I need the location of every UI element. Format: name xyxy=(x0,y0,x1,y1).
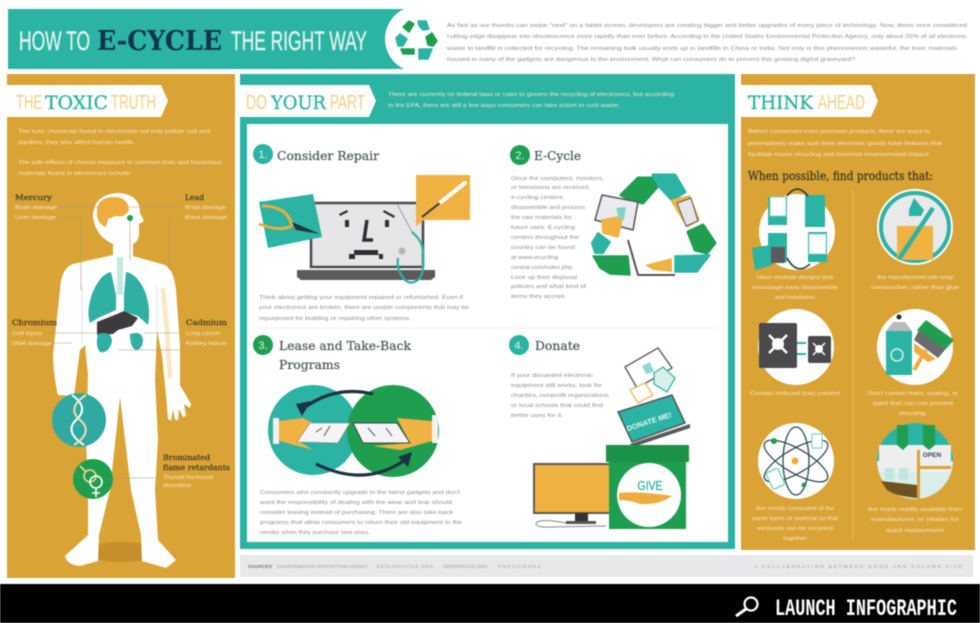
icon: magnifier xyxy=(736,598,758,616)
text: think ahead intro: Before consumers even purchase products, there are ways to xyxy=(748,129,930,135)
label: cadmium: Cadmium xyxy=(186,319,227,327)
step 4: donate xyxy=(509,335,690,529)
illustration: recycling triangle with devices xyxy=(592,175,715,275)
feature: readily available parts xyxy=(868,423,962,534)
caption: same types of material so that xyxy=(752,516,839,522)
monitor xyxy=(534,464,612,527)
text: toxic truth intro: materials found in electronics include: xyxy=(18,171,133,177)
icon: atom xyxy=(758,423,834,499)
intro text: As fast as our thumbs can swipe "next" on a tablet screen, developers are creating bigger and better upgrades of every piece of technology. Now, items once considered xyxy=(447,23,967,29)
illustration: donated devices falling into give box xyxy=(534,348,690,529)
eye dot xyxy=(127,215,133,221)
caption: Are manufactured with snap xyxy=(877,275,953,281)
text: e-cycle: policies and what kind of xyxy=(511,284,587,290)
text: do your part intro: to the EPA, there are still a few ways consumers can take action to curb waste. xyxy=(388,103,621,109)
callout lines xyxy=(44,207,184,478)
give box xyxy=(606,445,689,529)
icon: recycle symbol xyxy=(396,21,437,59)
intro text: housed in many of the gadgets are dangerous to the environment. What can consumers do to prevent this growing digital graveyard? xyxy=(447,57,855,63)
text: donate xyxy=(511,373,611,419)
label: lead: Bone damage xyxy=(185,215,227,221)
text: toxic truth intro: The toxic chemicals found in electronics not only pollute soil and xyxy=(18,129,210,135)
footer: sources strip: ENVIRONMENTAL PROTECTION AGENCY xyxy=(277,564,368,569)
number badge 2: 2. xyxy=(515,150,525,162)
heading: donate: Donate xyxy=(535,339,580,353)
number badge 4: 4. xyxy=(514,340,524,352)
footer: sources strip: POPSCIENCE xyxy=(498,564,541,569)
caption: Are made readily available from xyxy=(868,507,962,513)
heading: lease and take-back programs: Lease and Take-Back xyxy=(279,339,412,353)
caption: manufacturer, or retailer for xyxy=(871,517,959,523)
organ: kidneys xyxy=(97,333,143,352)
title xyxy=(19,26,367,57)
bottom bar: launch infographic xyxy=(0,584,980,623)
text: lease and take-back: vendor when they purchase new ones. xyxy=(260,530,371,536)
label: cadmium: Lung cancer xyxy=(186,331,221,337)
caption xyxy=(752,506,839,542)
icon: spray can and brush xyxy=(877,309,954,385)
label: lead: Brain damage xyxy=(185,205,226,211)
text: consider repair: repurposed for building or repairing other systems. xyxy=(259,316,412,322)
ribbon heading: the toxic truth: TOXIC xyxy=(45,92,108,114)
caption: and installation xyxy=(775,295,815,301)
text: e-cycle: country can be found xyxy=(511,245,575,251)
stethoscope xyxy=(397,204,423,283)
text: think ahead intro: preemptively make sure their electronic goods have features that xyxy=(748,141,943,147)
heading: lease and take-back programs: Programs xyxy=(279,358,340,372)
laptop with donate me screen: DONATE ME! xyxy=(626,410,673,433)
text: toxic truth intro: aquifers, they also affect human health. xyxy=(18,140,136,146)
footer: sources strip: SOURCES xyxy=(248,564,272,569)
icon: storefront: OPEN xyxy=(923,452,942,459)
text: do your part intro xyxy=(388,92,674,109)
text: e-cycle: future uses. E-cycling xyxy=(511,225,575,231)
organ: lungs xyxy=(88,257,149,325)
give box: GIVE xyxy=(638,478,663,493)
number badge 3 xyxy=(253,335,273,355)
heading: lease and take-back programs xyxy=(279,339,412,372)
text: e-cycle: at www.ecycling xyxy=(511,255,558,261)
title: HOW TO xyxy=(19,26,90,56)
label: mercury: Mercury xyxy=(15,194,52,202)
text: think ahead intro: facilitate easier recycling and minimize environmental impact: xyxy=(748,152,931,158)
feature: same materials xyxy=(752,423,839,542)
icon: modular device xyxy=(752,189,835,270)
text: toxic truth intro xyxy=(18,129,222,177)
caption xyxy=(871,275,959,291)
text: donate: better uses for it. xyxy=(511,413,564,419)
caption: encourage easy disassembly xyxy=(752,285,838,291)
title: E-CYCLE xyxy=(97,26,222,57)
subheading: when possible: When possible, find products that: xyxy=(748,168,933,183)
ribbon heading: the toxic truth: TRUTH xyxy=(111,92,156,114)
laptop with donate me screen xyxy=(618,395,690,447)
number badge 2 xyxy=(510,145,530,165)
label: brominated flame retardants xyxy=(163,454,230,489)
caption: recycling. xyxy=(899,411,928,417)
text: lease and take-back: want the responsibility of dealing with the wear and tear should xyxy=(259,500,452,506)
text: do your part intro: There are currently no federal laws or rules to govern the recycling of electronics, but according xyxy=(388,92,674,98)
circle: dna xyxy=(52,393,106,447)
caption: together xyxy=(783,536,807,542)
label: mercury xyxy=(15,194,57,221)
ribbon heading: do your part: PART xyxy=(330,92,365,114)
armpit creases xyxy=(82,285,157,345)
text: e-cycle: disassemble and process xyxy=(511,205,585,211)
caption: construction, rather than glue xyxy=(871,285,959,291)
footer: sources strip: ECOLIFESTYLE.ORG xyxy=(377,564,433,569)
caption: Have modular designs that xyxy=(757,275,834,281)
label: chromium: Chromium xyxy=(12,319,57,327)
heading: e-cycle: E-Cycle xyxy=(534,149,581,163)
text: e-cycle: e-cycling centers xyxy=(511,195,563,201)
feature: reduced toxic content xyxy=(750,309,841,397)
arm bones xyxy=(163,288,170,378)
text: e-cycle: Once the computers, monitors, xyxy=(511,176,605,182)
icon: toxic boxes shrinking xyxy=(758,309,834,385)
intro text: cutting-edge disappear into obsolescence more rapidly than ever before. According to the United States Environmental Protection Agency, only about 25% of all electronic xyxy=(447,34,967,40)
caption: Are mostly composed of the xyxy=(756,506,834,512)
label: brominated flame retardants: Thyroid hormonal xyxy=(163,475,213,481)
label: brominated flame retardants: Brominated xyxy=(163,454,211,462)
label: cadmium: Kidney failure xyxy=(186,341,227,347)
heading: consider repair: Consider Repair xyxy=(277,149,379,163)
panel: think ahead xyxy=(741,74,975,550)
human body figure xyxy=(44,193,191,568)
illustration: swapping tablets xyxy=(268,385,439,477)
ribbon heading: think ahead: AHEAD xyxy=(818,92,865,114)
ribbon heading: do your part xyxy=(240,85,376,117)
text: e-cycle: Look up their disposal xyxy=(511,275,577,281)
text: donate: equipment still works, look for xyxy=(511,383,602,389)
text: lease and take-back: Consumers who constantly upgrade to the latest gadgets and don't xyxy=(260,490,461,496)
label: cadmium xyxy=(186,319,227,347)
intro text: waste to landfill is collected for recycling. The remaining bulk usually ends up in landfills in China or India. Not only is this phenomenon wasteful, the toxic materials xyxy=(446,46,957,52)
text: consider repair: your electronics are broken, there are usable components that may be xyxy=(259,305,469,311)
footer: sources strip: A COLLABORATION BETWEEN GOOD AND COLUMN FIVE xyxy=(754,564,962,569)
organ: liver xyxy=(97,311,138,335)
caption: Contain reduced toxic content xyxy=(750,391,841,397)
caption xyxy=(752,275,838,301)
label: chromium: DNA damage xyxy=(12,341,52,347)
feature: no foam or coating xyxy=(868,309,958,417)
step 2: e-cycle xyxy=(510,145,715,300)
text: e-cycle: central.com/index.php. xyxy=(511,265,574,271)
feature: modular designs xyxy=(752,189,838,301)
ribbon heading: the toxic truth: THE xyxy=(16,92,42,114)
label: chromium: Cell injury xyxy=(12,331,42,337)
teal note with pliers xyxy=(259,194,322,248)
text: toxic truth intro: The side effects of chronic exposure to common toxic and hazardous xyxy=(18,160,222,166)
label: mercury: Liver damage xyxy=(15,215,56,221)
tablet xyxy=(625,348,672,388)
icon: no glue xyxy=(877,189,953,265)
text: e-cycle: or televisions are received, xyxy=(511,185,591,191)
caption: quick replacement xyxy=(886,528,945,534)
number badge 3: 3. xyxy=(258,340,268,352)
label: chromium xyxy=(12,319,57,347)
panel: the toxic truth xyxy=(7,74,235,578)
label: lead xyxy=(185,194,227,221)
footer: sources strip xyxy=(240,555,973,577)
title: THE RIGHT WAY xyxy=(231,26,367,56)
orange note with screwdriver xyxy=(416,175,470,226)
label: brominated flame retardants: disorders xyxy=(163,483,191,489)
footer: sources strip: GREENPEACE.ORG xyxy=(443,564,488,569)
ribbon heading: think ahead xyxy=(741,85,878,117)
ribbon heading: think ahead: THINK xyxy=(748,92,814,114)
floor shadow xyxy=(85,542,159,562)
sad face xyxy=(339,210,395,259)
caption xyxy=(868,391,958,417)
text: donate: If your discarded electronic xyxy=(511,373,593,379)
number badge 1 xyxy=(253,144,273,164)
label: brominated flame retardants: flame retardants xyxy=(163,464,230,472)
text: donate: charities, nonprofit organizations, xyxy=(511,393,611,399)
step 1: consider repair xyxy=(253,144,470,322)
ribbon heading: do your part: YOUR xyxy=(270,92,327,114)
text: e-cycle: the raw materials for xyxy=(511,215,572,221)
caption xyxy=(868,507,962,534)
text: e-cycle xyxy=(511,176,605,300)
caption: elements can be recycled xyxy=(757,526,833,532)
ribbon heading: the toxic truth xyxy=(7,85,168,117)
header banner xyxy=(8,6,451,72)
label: lead: Lead xyxy=(185,194,205,202)
text: donate: or local schools that could find xyxy=(511,403,603,409)
text: e-cycle: items they accept. xyxy=(511,294,567,300)
text: lease and take-back: programs that allow consumers to return their old equipment to the xyxy=(260,520,462,526)
text: consider repair xyxy=(259,295,469,322)
text: lease and take-back: consider leasing instead of purchasing. There are also take-back xyxy=(260,510,453,516)
text: e-cycle: centers throughout the xyxy=(511,235,579,241)
panel: do your part xyxy=(240,74,735,549)
organ: brain xyxy=(97,197,129,227)
intro text xyxy=(446,23,967,63)
number badge 4 xyxy=(509,335,529,355)
text: think ahead intro xyxy=(748,129,943,158)
feature: snap construction xyxy=(871,189,959,291)
label: mercury: Brain damage xyxy=(15,205,57,211)
circle: hormone symbols xyxy=(73,459,113,499)
illustration: sad laptop xyxy=(259,175,470,283)
text: consider repair: Think about getting your equipment repaired or refurbished. Even if xyxy=(259,295,464,301)
ribbon heading: do your part: DO xyxy=(246,92,267,114)
body silhouette xyxy=(53,193,191,568)
caption: Don't contain foam, coating, or xyxy=(868,391,958,397)
text: lease and take-back xyxy=(259,490,462,536)
number badge 1: 1. xyxy=(258,149,268,161)
step 3: lease and take-back xyxy=(253,335,462,536)
caption: paint that can can prevent xyxy=(873,401,954,407)
